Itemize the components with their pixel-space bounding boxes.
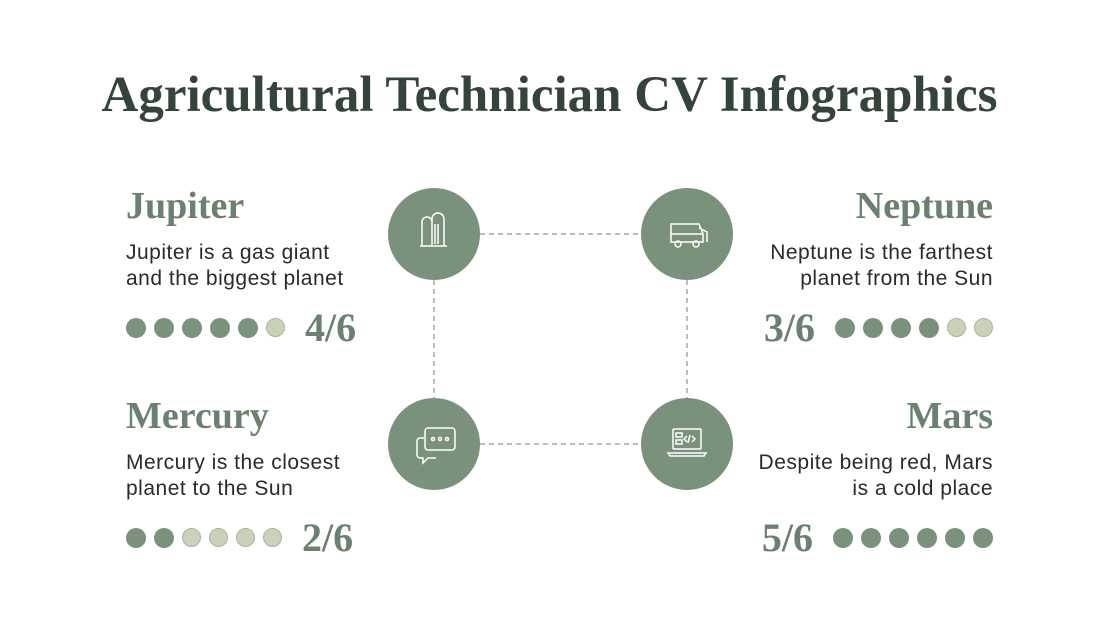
- text: Neptune is the farthest: [770, 241, 993, 264]
- icon circle: silos: [388, 188, 480, 280]
- rating: 3/6: [764, 305, 815, 350]
- text: Despite being red, Mars: [759, 451, 993, 474]
- text: [126, 241, 344, 290]
- rating: [126, 305, 356, 350]
- icon circle: laptop code: [641, 398, 733, 490]
- text: planet from the Sun: [800, 267, 993, 290]
- text: is a cold place: [852, 477, 993, 500]
- rating: 5/6: [762, 515, 813, 560]
- icon circle: chat: [388, 398, 480, 490]
- text: [126, 451, 340, 500]
- heading: Mars: [906, 395, 993, 437]
- icon circle: harvester: [641, 188, 733, 280]
- rating: [126, 515, 353, 560]
- title: Agricultural Technician CV Infographics: [102, 67, 997, 123]
- panel: Neptune: [764, 185, 993, 350]
- rating: [764, 305, 993, 350]
- heading: Mercury: [126, 395, 269, 437]
- panel: Mars: [759, 395, 993, 560]
- rating: [762, 515, 993, 560]
- text: and the biggest planet: [126, 267, 344, 290]
- text: Mercury is the closest: [126, 451, 340, 474]
- text: [759, 451, 993, 500]
- text: Jupiter is a gas giant: [126, 241, 330, 264]
- rating: 2/6: [302, 515, 353, 560]
- heading: Neptune: [856, 185, 993, 227]
- panel: Mercury: [126, 395, 353, 560]
- rating: 4/6: [305, 305, 356, 350]
- text: planet to the Sun: [126, 477, 293, 500]
- text: [770, 241, 993, 290]
- heading: Jupiter: [126, 185, 244, 227]
- panel: Jupiter: [126, 185, 356, 350]
